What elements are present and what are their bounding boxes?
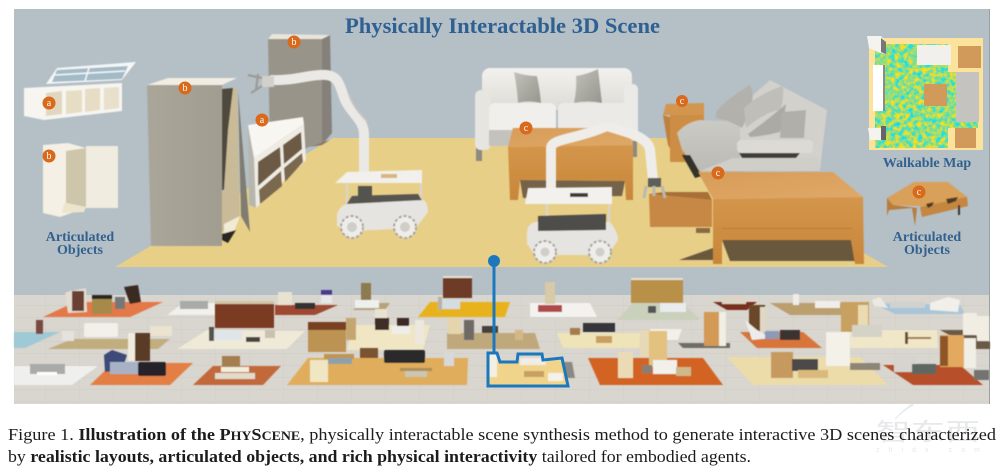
badge: b on large cabinet: b (182, 83, 188, 94)
label: articulated objects left (46, 230, 114, 258)
watermark: zhidx.com (876, 447, 980, 454)
badge: c on side table (676, 95, 688, 107)
mini rooms: bottom row (14, 322, 989, 386)
badge: c on foreground table (712, 166, 724, 180)
object: open shelf a (248, 117, 306, 208)
mini rooms: middle row (14, 301, 990, 350)
icon: articulated cabinet b (43, 143, 118, 217)
label: walkable map: Walkable Map (883, 156, 971, 171)
badge: a on shelf icon: a (47, 98, 52, 109)
badge: c on table icon: c (917, 187, 922, 198)
robot base 2 (525, 187, 618, 263)
title: Physically Interactable 3D Scene (345, 13, 660, 38)
object: rear tall cabinet (268, 34, 332, 152)
badge: a on shelf (256, 114, 268, 126)
robot arm 2 (551, 126, 665, 198)
badge: b on large cabinet (178, 82, 192, 94)
object: L-shaped sofa (677, 80, 827, 178)
badge: c on side table: c (680, 96, 685, 107)
label: articulated objects left: Objects (57, 243, 103, 258)
badge: b on cabinet icon (42, 150, 56, 162)
label: articulated objects right: Articulated (893, 230, 961, 245)
badge: b on rear cabinet: b (292, 37, 296, 48)
object: coffee table behind robot (508, 128, 633, 200)
object: back sofa (475, 68, 638, 161)
label: articulated objects right (893, 230, 961, 258)
badge: c on coffee table (520, 122, 532, 134)
badge: b on rear cabinet (288, 36, 300, 48)
badge: a on shelf: a (260, 115, 265, 126)
badge: a on shelf icon (42, 96, 56, 110)
chart: walkable map (867, 36, 983, 150)
watermark (876, 405, 980, 454)
blue path and pin to selected room (488, 255, 568, 386)
object: foreground drawer table (649, 172, 864, 264)
caption: Figure 1. Illustration of the P HYSCENE, physically interactable scene synthesis method to generate interactive 3D scenes characterized (8, 425, 996, 444)
badge: b on cabinet icon: b (46, 151, 52, 162)
robot base 1 (335, 170, 428, 238)
badge: c on coffee table: c (524, 123, 529, 134)
badge: c on foreground table: c (716, 168, 721, 179)
object: side table (663, 103, 704, 162)
watermark: 智东西 (876, 419, 980, 446)
mini rooms: top row (43, 276, 965, 320)
robot arm 1 (248, 74, 368, 172)
label: articulated objects left: Articulated (46, 230, 114, 245)
panel: main room floor (115, 138, 888, 267)
icon: articulated table c (887, 182, 968, 226)
label: articulated objects right: Objects (904, 243, 950, 258)
caption: by realistic layouts, articulated objects, and rich physical interactivity tailored for embodied agents. (8, 447, 751, 466)
object: large cabinet with open door (147, 78, 250, 246)
icon: articulated shelf a (24, 62, 136, 120)
caption (8, 425, 996, 466)
badge: c on table icon (912, 186, 926, 198)
